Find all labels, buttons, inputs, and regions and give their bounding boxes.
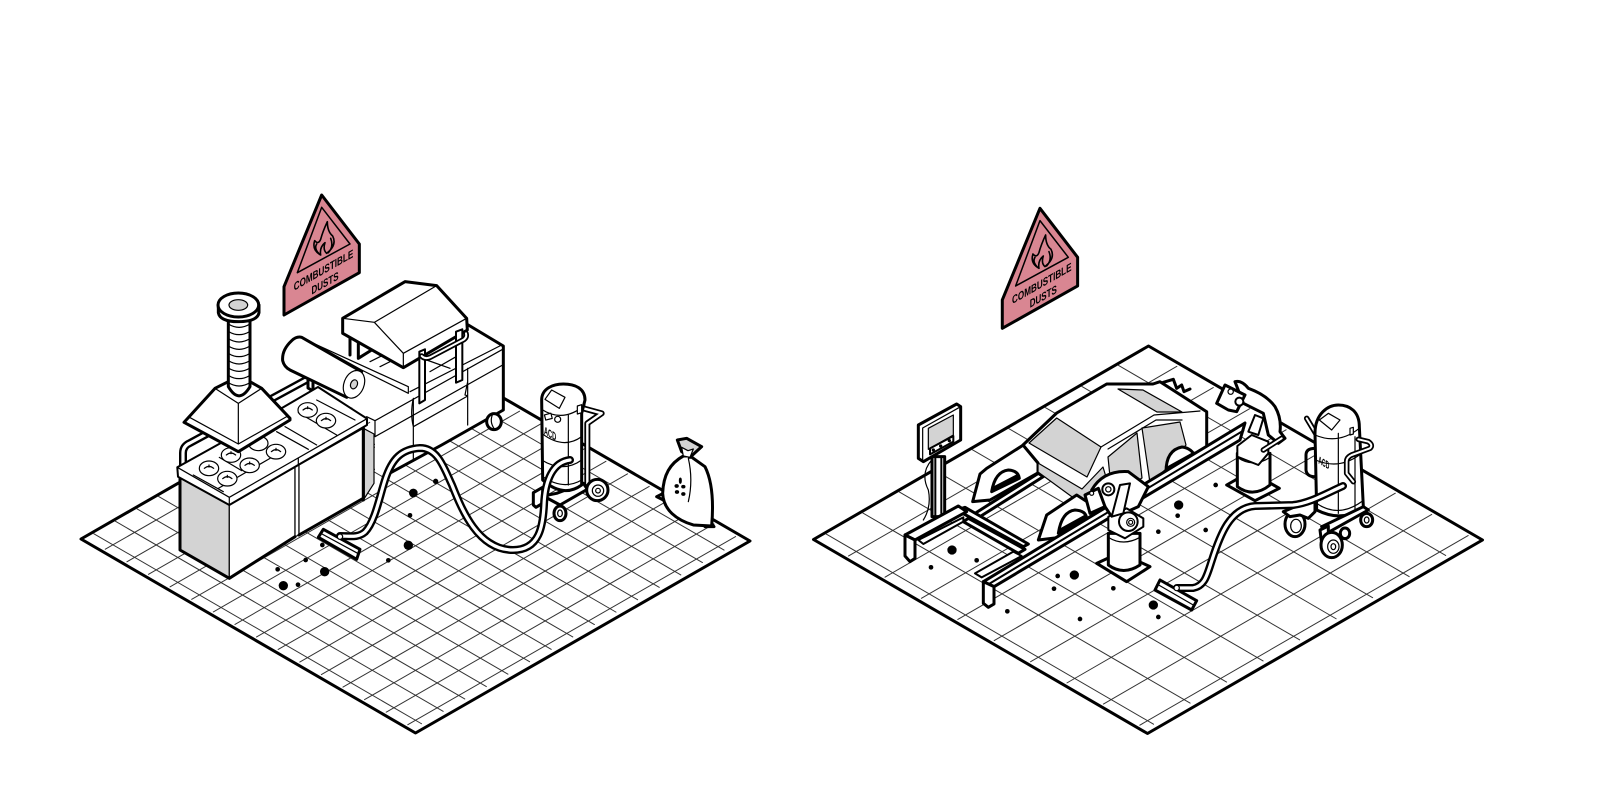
cooking counters <box>177 387 367 578</box>
roof lines <box>1101 411 1200 449</box>
icon: wheat <box>675 478 685 495</box>
grain sack <box>657 438 714 527</box>
robot arm: front <box>1085 472 1150 582</box>
sealer lid and handle <box>343 282 467 403</box>
vacuum sealer machine <box>283 282 503 500</box>
counter divider strip <box>295 465 299 537</box>
back rail pipe <box>183 375 313 466</box>
warning sign: combustible dusts: COMBUSTIBLE <box>1012 261 1072 307</box>
large wheel <box>587 479 608 501</box>
machine wheel <box>487 414 501 430</box>
front assembly beam <box>975 423 1245 607</box>
handle frame <box>583 408 602 483</box>
scene: automotive assembly line <box>814 208 1482 734</box>
counter front faces <box>229 467 295 578</box>
monitor screen <box>918 404 961 462</box>
extractor hood and chimney <box>184 293 290 452</box>
control panel icons <box>544 413 561 422</box>
floor nozzle: right <box>1155 580 1197 610</box>
caster wheels <box>533 487 566 521</box>
industrial vacuum cleaner: right <box>1283 405 1373 558</box>
floor grid: left <box>81 347 750 733</box>
floor nozzle: left <box>318 529 360 559</box>
counter left face <box>180 477 229 578</box>
dust particles: left <box>275 479 438 590</box>
counter top <box>177 387 367 505</box>
assembly frame rear beam <box>905 473 1043 562</box>
vacuum hose: right <box>1177 486 1343 588</box>
warning sign: combustible dusts: DUSTS <box>1030 283 1057 311</box>
warning sign: combustible dusts: COMBUSTIBLE <box>294 248 353 294</box>
paper roller <box>283 337 408 401</box>
robot tool head <box>1085 488 1105 513</box>
front wheels <box>1320 526 1350 558</box>
sunroof <box>1118 389 1182 412</box>
burners and hob lines <box>193 400 355 492</box>
side windows <box>1108 433 1142 497</box>
monitor post <box>932 457 945 517</box>
tank body <box>1315 405 1363 516</box>
hood body <box>184 382 290 452</box>
control monitor on stand <box>918 404 961 520</box>
icon: flame <box>1032 235 1052 268</box>
icon: flame <box>314 222 334 255</box>
rear wheels <box>1283 498 1373 537</box>
rear arch <box>1166 447 1196 475</box>
back handle <box>1307 418 1322 443</box>
industrial vacuum cleaner: left <box>533 384 608 521</box>
brand text: ACD <box>1318 454 1329 473</box>
second counter <box>299 428 363 535</box>
windscreen <box>1029 418 1101 477</box>
floor grid: right <box>814 346 1482 734</box>
left body panel <box>973 445 1038 502</box>
front handle <box>1347 439 1371 482</box>
cart base <box>1322 507 1368 533</box>
car body shell <box>973 382 1207 510</box>
warning sign: combustible dusts: DUSTS <box>311 270 339 298</box>
chimney cap <box>218 305 259 322</box>
tank body <box>542 384 585 491</box>
vacuum hose: left <box>340 448 570 550</box>
scene: food processing room <box>81 195 750 733</box>
right body panel <box>1038 495 1100 540</box>
robot column <box>1108 533 1140 570</box>
side grip <box>1306 448 1315 477</box>
interior <box>1038 463 1112 510</box>
machine base <box>318 323 503 500</box>
robot upper arm <box>1092 472 1148 517</box>
robot arm: rear <box>1217 381 1285 501</box>
dust particles: right <box>929 483 1218 621</box>
cabin <box>1023 382 1207 500</box>
chimney stack <box>228 317 250 396</box>
brand text: ACD <box>544 425 556 444</box>
robot base plate <box>1097 553 1150 582</box>
warning sign: combustible dusts <box>284 195 359 315</box>
small rear fixture <box>1163 379 1190 392</box>
warning sign: combustible dusts <box>1002 208 1078 328</box>
